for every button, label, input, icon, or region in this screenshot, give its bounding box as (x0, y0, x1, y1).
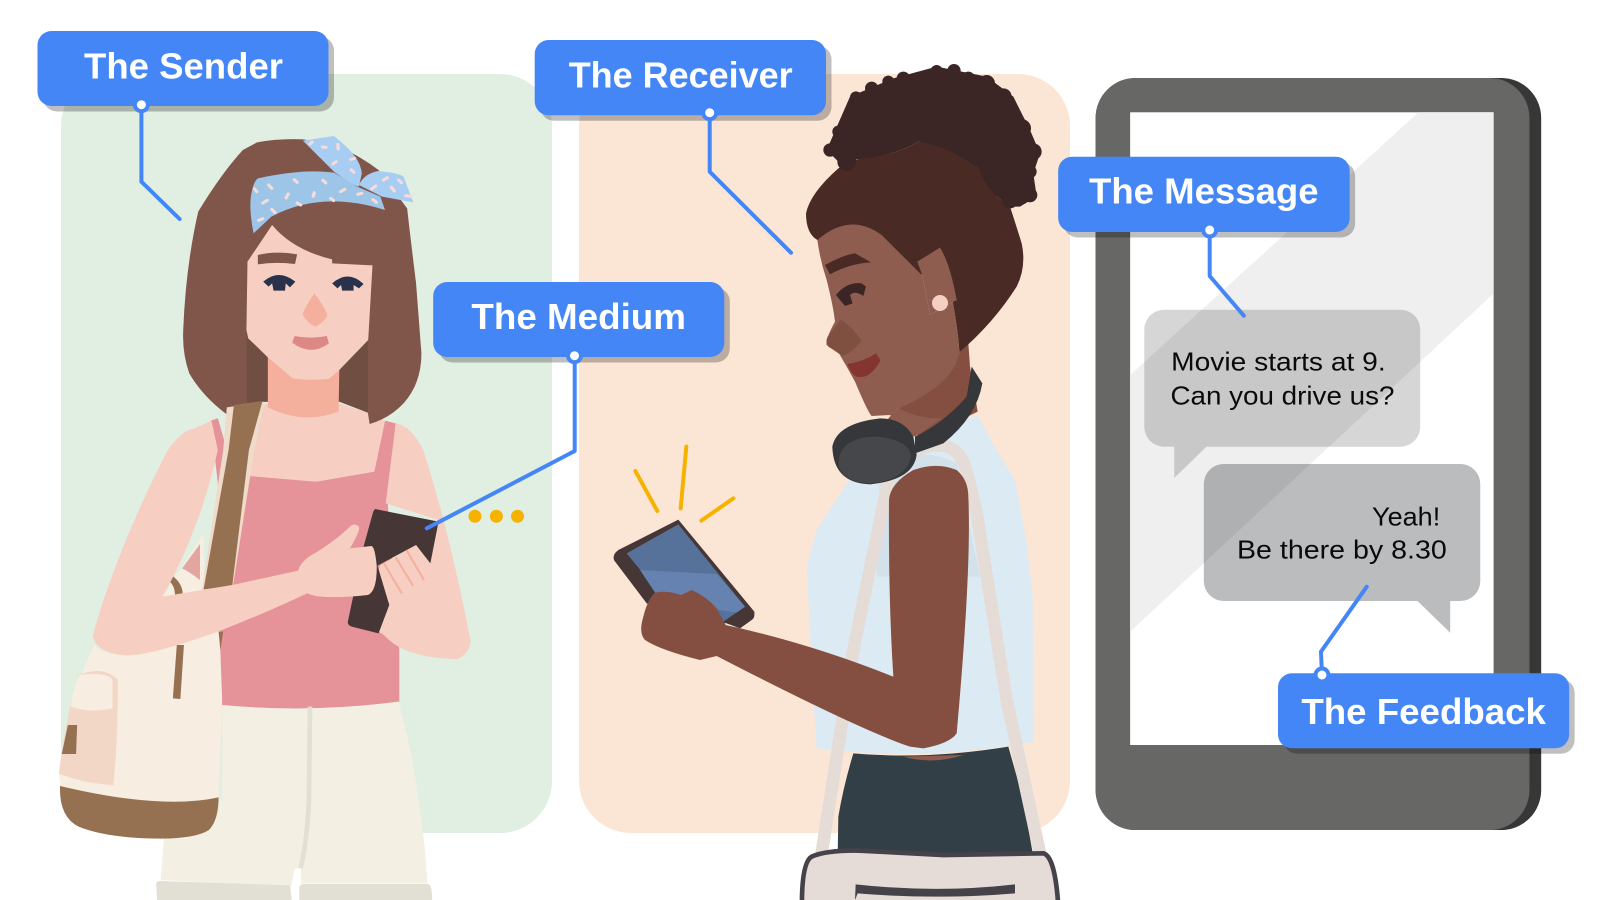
icon: notification ticks (635, 447, 733, 521)
shirt (807, 415, 1034, 754)
feedback text: Be there by 8.30 (1237, 537, 1447, 565)
neck (888, 343, 978, 435)
pink top (211, 418, 399, 708)
phone held by receiver (614, 520, 754, 628)
ear (917, 248, 957, 315)
headphones (832, 367, 982, 484)
label: The Sender (38, 31, 334, 219)
feedback text (1237, 503, 1447, 565)
handbag (802, 851, 1059, 900)
device shadow side (1096, 78, 1541, 830)
shorts cuffs (156, 881, 432, 900)
left arm and hand (93, 421, 377, 655)
mouth (847, 353, 881, 377)
skirt (838, 747, 1033, 857)
neck (268, 357, 339, 417)
bag straps (822, 445, 1040, 853)
illustration: receiver woman (614, 64, 1059, 900)
icon: typing dots (468, 510, 524, 523)
chest (229, 403, 385, 482)
eye (836, 283, 866, 306)
nose (826, 319, 862, 356)
label: The Sender: The Sender (84, 45, 283, 86)
bandana (250, 136, 413, 233)
hair (806, 142, 1023, 352)
feedback bubble (1204, 464, 1480, 633)
message text: Movie starts at 9. (1171, 349, 1386, 377)
mouth (292, 336, 329, 350)
top strap (211, 418, 227, 480)
phone held by sender (348, 509, 439, 633)
label: The Receiver: The Receiver (569, 54, 793, 95)
message text (1170, 349, 1394, 410)
face (817, 224, 959, 416)
screen glare (1130, 112, 1494, 632)
panel: sender background (61, 74, 552, 833)
nose (302, 293, 327, 327)
eyebrow (258, 253, 297, 264)
label: The Receiver (535, 40, 832, 253)
illustration: sender girl (59, 136, 471, 900)
afro bun (823, 64, 1042, 208)
finger lines (384, 550, 424, 593)
phone device (1096, 78, 1541, 830)
label: The Medium: The Medium (471, 296, 686, 337)
message text: Can you drive us? (1170, 382, 1394, 410)
label: The Medium (427, 282, 730, 528)
label: The Feedback: The Feedback (1301, 691, 1546, 732)
eyes (263, 275, 364, 291)
message bubble (1144, 310, 1420, 478)
right arm (377, 423, 471, 659)
device body (1096, 78, 1529, 830)
shoulder bag (59, 533, 223, 839)
label: The Message (1058, 157, 1355, 316)
feedback text: Yeah! (1372, 503, 1440, 531)
hair (183, 139, 421, 424)
label: The Message: The Message (1089, 170, 1319, 211)
panel: receiver background (579, 74, 1070, 833)
face (246, 225, 372, 380)
earring (932, 295, 948, 311)
label: The Feedback (1278, 587, 1575, 754)
screen (1130, 112, 1494, 745)
shorts (161, 702, 427, 887)
midriff (903, 755, 963, 760)
eyebrow (825, 253, 871, 274)
arm and hand (641, 466, 969, 748)
hair shadow (246, 333, 368, 413)
bag strap (202, 401, 264, 591)
